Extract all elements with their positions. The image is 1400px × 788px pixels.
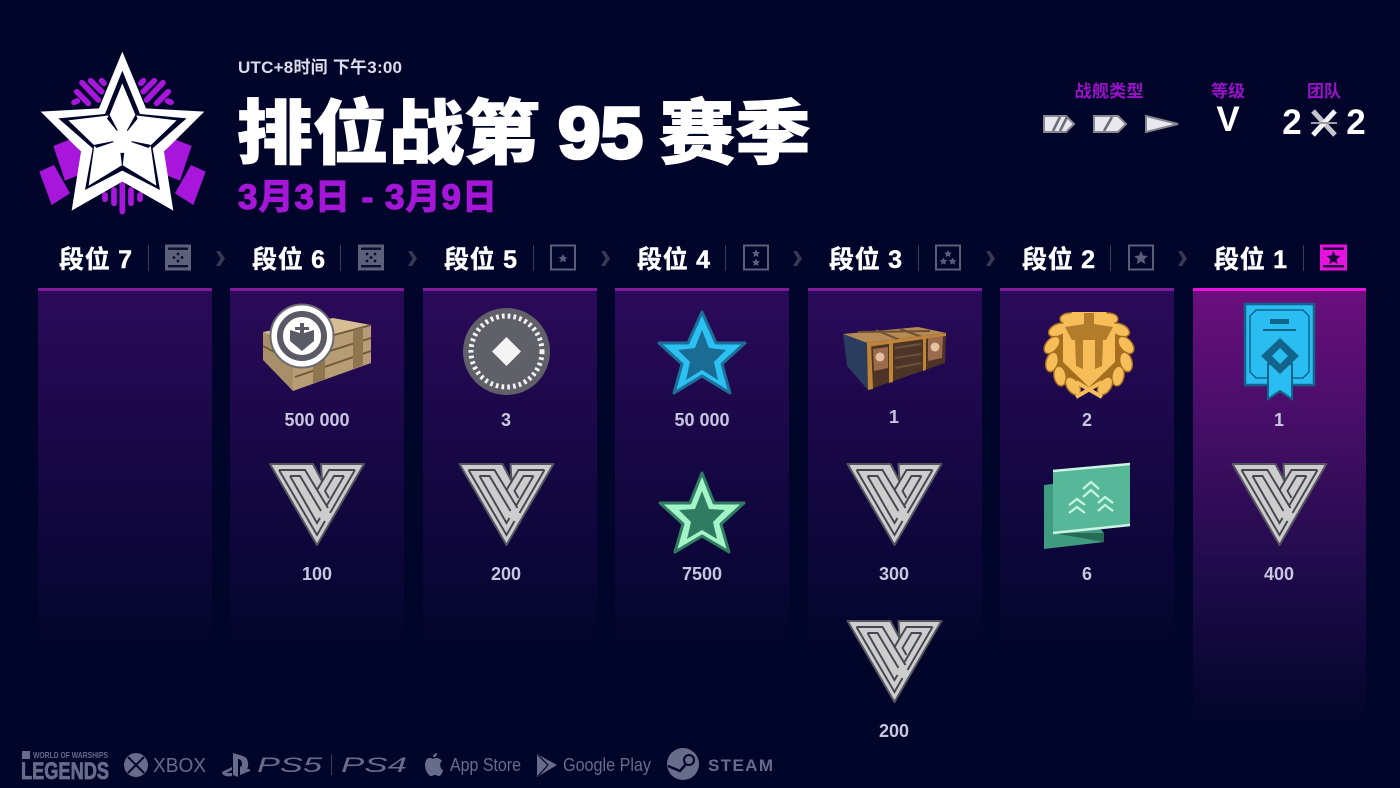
logo: World of Warships Legends: WORLD OF WARSHIPS — [33, 750, 108, 760]
logo: PS5 and PS4: PS5 — [257, 754, 323, 777]
legend: ship type — [1044, 82, 1178, 132]
legend: tier: V — [1216, 100, 1240, 139]
arrow — [601, 251, 610, 266]
logo: App Store: App Store — [450, 755, 521, 775]
logo: Steam: STEAM — [708, 756, 773, 775]
footer: platform logos — [21, 748, 773, 785]
arrow — [216, 251, 225, 266]
value: credits: 500 000 — [284, 410, 350, 430]
arrow — [793, 251, 802, 266]
panel: rank 1 — [1193, 288, 1366, 723]
legend: tier — [1211, 81, 1245, 139]
heading: rank 1 — [1214, 244, 1347, 274]
value: V badge rank 1: 400 — [1264, 564, 1294, 584]
icon: ship class double bar — [1044, 116, 1074, 132]
icon: V badge rank 5 — [460, 464, 554, 545]
value: container: 1 — [889, 407, 899, 427]
legend: tier: 等级 — [1211, 81, 1245, 101]
legend: team — [1282, 82, 1366, 142]
icon: V badge rank 1 — [1232, 464, 1326, 545]
icon: gold laurel medal — [1041, 312, 1137, 398]
logo: Xbox — [124, 753, 206, 777]
value: medal: 2 — [1082, 410, 1092, 430]
logo: App Store — [425, 753, 521, 776]
logo: World of Warships Legends — [21, 750, 109, 785]
icon: ship class single bar — [1094, 116, 1126, 132]
panel: rank 4 — [615, 288, 789, 650]
value: flags: 6 — [1082, 564, 1092, 584]
heading: rank 1: 段位 1 — [1214, 245, 1287, 274]
time label: UTC+8时间 下午3:00 — [238, 57, 402, 77]
icon: V badge rank 6 — [270, 464, 364, 545]
legend: team: 团队 — [1307, 82, 1341, 101]
heading: rank 2 — [1022, 245, 1153, 274]
icon: grey coin — [463, 308, 550, 395]
title — [237, 94, 811, 174]
icon: ship class wedge — [1146, 116, 1178, 132]
panel: rank 2 — [1000, 288, 1174, 650]
logo: Google Play — [537, 754, 651, 777]
heading: rank 6: 段位 6 — [252, 245, 325, 274]
legend: team: 2 — [1346, 103, 1366, 142]
value: blue star: 50 000 — [674, 410, 730, 430]
value: green star: 7500 — [682, 564, 722, 584]
panel: rank 3 — [808, 288, 982, 650]
heading: rank 5: 段位 5 — [444, 245, 517, 274]
icon: V badge rank 3 second — [848, 621, 942, 702]
value: coin count: 3 — [501, 410, 511, 430]
heading: rank 3: 段位 3 — [829, 245, 902, 274]
logo: Xbox: XBOX — [153, 755, 206, 777]
heading: rank 3 — [829, 245, 960, 274]
title: 95 — [558, 94, 643, 174]
logo: Steam — [667, 748, 773, 780]
value: V badge rank 3 second: 200 — [879, 721, 909, 741]
icon: blue certificate — [1245, 304, 1314, 399]
heading: rank 5 — [444, 245, 575, 274]
title: 排位战第 — [237, 94, 540, 173]
heading: rank 2: 段位 2 — [1022, 245, 1095, 274]
panel: rank 5 — [423, 288, 597, 650]
logo: PS5 and PS4 — [222, 753, 407, 777]
arrow — [408, 251, 417, 266]
icon: green star — [660, 473, 744, 552]
value: certificate: 1 — [1274, 410, 1284, 430]
heading: rank 4: 段位 4 — [637, 245, 710, 274]
icon: green flags — [1044, 463, 1130, 549]
legend: team: 2 — [1282, 103, 1302, 142]
legend: ship type: 战舰类型 — [1074, 82, 1144, 101]
value: V badge rank 6: 100 — [302, 564, 332, 584]
arrow — [1178, 251, 1187, 266]
title: 赛季 — [659, 94, 811, 173]
logo: PS5 and PS4: PS4 — [341, 754, 407, 777]
value: V badge rank 3: 300 — [879, 564, 909, 584]
date range: 3月3日 - 3月9日 — [238, 178, 497, 217]
heading: rank 4 — [637, 245, 768, 274]
heading: rank 6 — [252, 244, 384, 274]
logo: Google Play: Google Play — [563, 755, 651, 775]
icon: blue star — [659, 312, 745, 393]
icon: crossed swords — [1311, 111, 1337, 135]
icon: V badge rank 3 — [848, 464, 942, 545]
panel: rank 6 — [230, 288, 404, 650]
icon: premium container — [843, 327, 946, 390]
heading: rank 7: 段位 7 — [59, 245, 132, 274]
icon: wooden crate with credits coin — [263, 304, 371, 391]
arrow — [986, 251, 995, 266]
value: V badge rank 5: 200 — [491, 564, 521, 584]
heading: rank 7 — [59, 244, 191, 274]
logo: World of Warships Legends: LEGENDS — [21, 758, 109, 785]
logo: star emblem — [39, 52, 206, 212]
panel: rank 7 — [38, 288, 212, 650]
